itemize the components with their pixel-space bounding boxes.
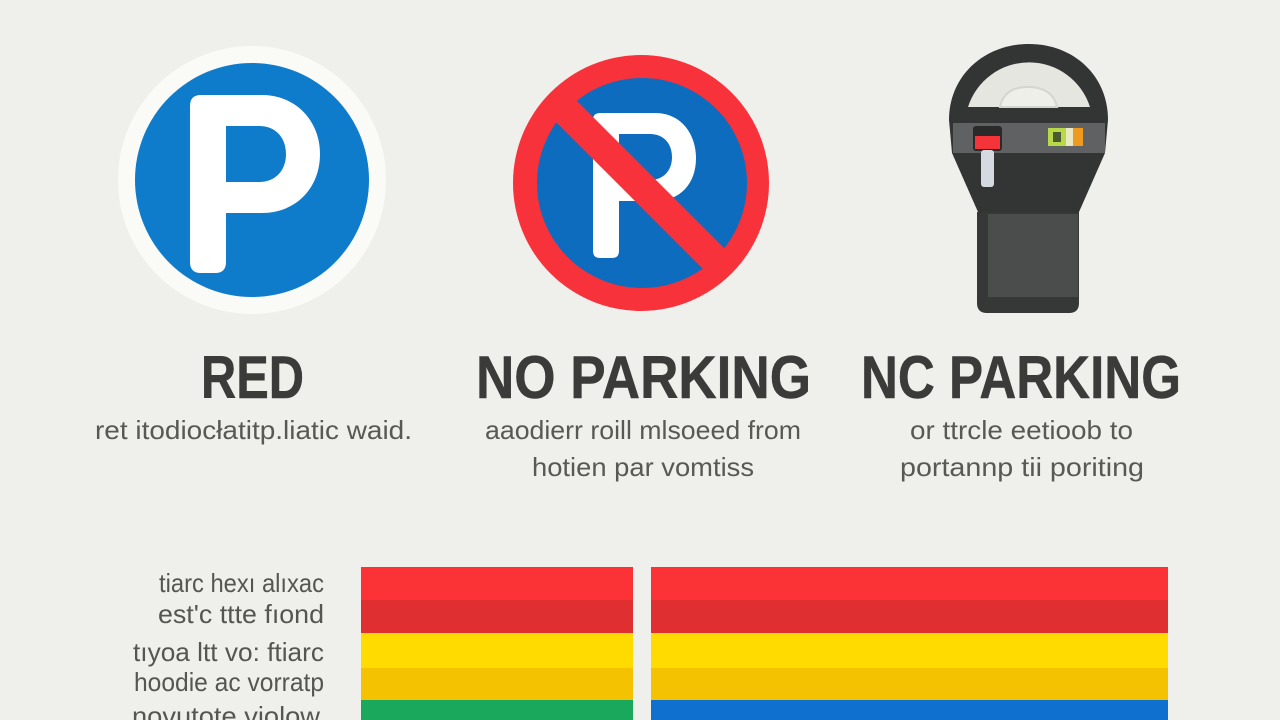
text: column 2 description	[485, 415, 801, 482]
meter display	[1048, 128, 1083, 146]
icon: no parking sign	[513, 55, 769, 311]
text: column 1 description: ret itodiocłatitp.liatic waid.	[95, 415, 412, 445]
icon: blue parking sign	[118, 46, 386, 314]
text: chart row labels: tiarc hexı alıxac	[159, 568, 324, 598]
text: column 2 description: hotien par vomtiss	[532, 452, 754, 482]
meter post	[977, 212, 1079, 313]
text: column 3 description	[900, 415, 1144, 482]
text: column 3 description: portannp tii poriting	[900, 452, 1144, 482]
heading: NC PARKING: NC PARKING	[861, 344, 1181, 411]
coin slot and lever	[973, 126, 1002, 187]
text: chart row labels: tıyoa ltt vo: ftiarc	[133, 637, 324, 667]
text: chart row labels: est'c ttte fıond	[158, 599, 324, 629]
heading: RED: RED	[201, 344, 304, 411]
text: column 3 description: or ttrcle eetioob to	[910, 415, 1133, 445]
chart: left colour bands	[361, 567, 633, 720]
text: column 2 description: aaodierr roill mlsoeed from	[485, 415, 801, 445]
heading: NO PARKING: NO PARKING	[476, 344, 811, 411]
text: chart row labels	[132, 568, 324, 720]
icon: parking meter	[949, 44, 1108, 313]
text: chart row labels: hoodie ac vorratp	[134, 667, 324, 697]
chart: right colour bands	[651, 567, 1168, 720]
